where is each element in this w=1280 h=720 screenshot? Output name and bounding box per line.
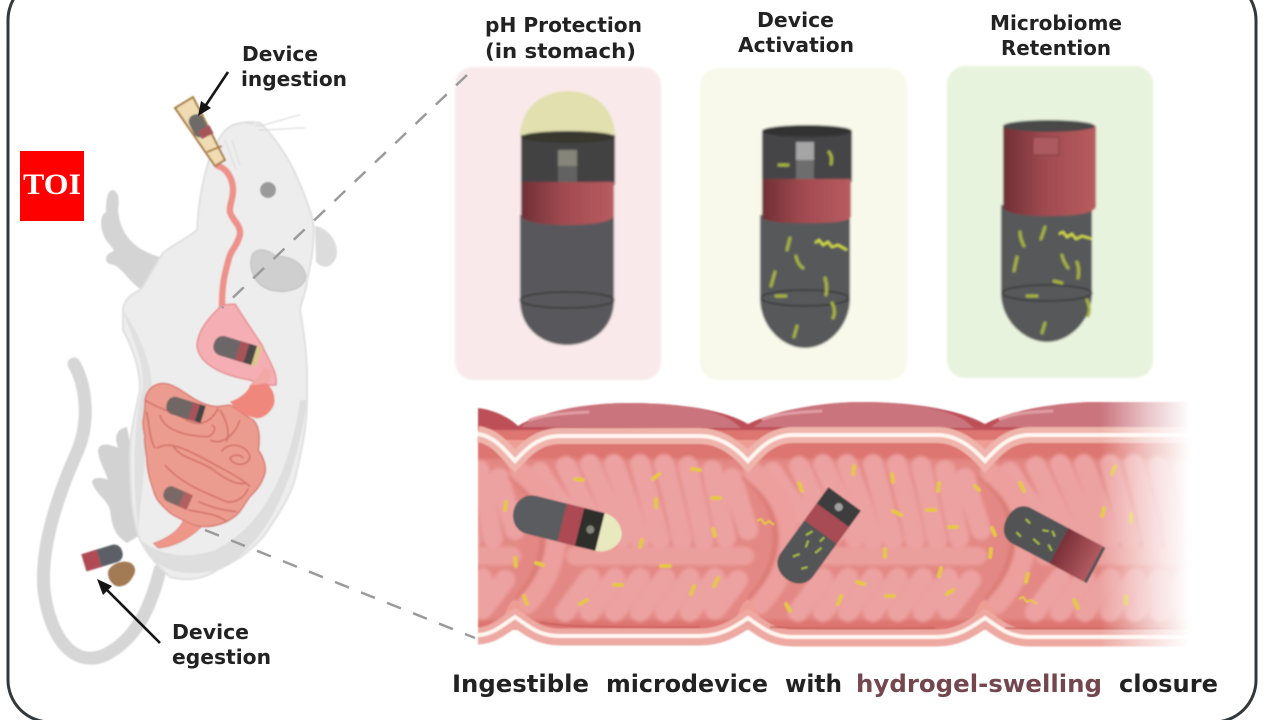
notch tips bottom	[492, 600, 1008, 630]
panel: device activation	[700, 68, 907, 380]
finger folds, lobe 0	[478, 459, 525, 621]
yellow bacteria specks	[505, 466, 1131, 611]
stomach outlet	[250, 367, 272, 385]
oral gavage device	[175, 97, 225, 166]
label: device ingestion	[241, 42, 347, 91]
egested capsule	[81, 543, 125, 571]
main caption	[452, 670, 1218, 698]
main caption: microdevice	[606, 670, 768, 698]
finger folds, lobe 2	[773, 464, 981, 612]
rat whiskers and nose	[225, 115, 305, 170]
heading: pH protection: pH Protection	[485, 13, 642, 37]
main caption: closure	[1119, 670, 1218, 698]
cap window	[796, 142, 814, 160]
cap window	[558, 150, 577, 166]
rat ear inner	[251, 250, 306, 291]
crescent shadow folds	[510, 475, 1014, 600]
bottom ring	[761, 290, 849, 306]
heading: device activation: Device	[757, 8, 834, 32]
TOI badge: TOI	[23, 168, 81, 201]
intestinal folds	[145, 400, 250, 522]
spiral bacterium	[1059, 232, 1092, 239]
bottom wall stripes	[478, 618, 1195, 638]
outer muscle bumps	[478, 402, 1195, 445]
arrow: device ingestion	[198, 72, 228, 116]
heading: microbiome retention	[990, 11, 1122, 60]
heading: pH protection	[485, 13, 642, 63]
panel: pH protection	[455, 67, 661, 380]
main caption: hydrogel-swelling	[856, 670, 1102, 698]
yellow spiral specks	[757, 519, 1037, 604]
crescent folds	[520, 472, 1026, 604]
muscle bump highlights	[521, 402, 1195, 428]
arrow: device egestion	[97, 579, 160, 643]
oesophagus	[218, 166, 240, 306]
capsule A: pH protected	[509, 492, 626, 556]
muscle bump gloss	[530, 411, 1052, 420]
notch tips top	[492, 440, 1008, 472]
dashed zoom line to intestine	[205, 530, 475, 638]
TOI badge	[20, 151, 84, 221]
bottom ring	[1002, 285, 1092, 301]
illustration: rat with digestive tract	[43, 97, 337, 658]
heading: pH protection: (in stomach)	[485, 39, 636, 63]
rectum	[153, 520, 202, 548]
finger folds, lobe 1	[540, 464, 748, 612]
mucosal folds	[478, 452, 1172, 624]
intestines	[143, 367, 275, 548]
capsule in upper intestine	[164, 395, 206, 423]
spiral bacterium	[815, 240, 847, 250]
bacteria	[771, 152, 834, 337]
rat belly shading	[140, 400, 307, 573]
bacteria	[1014, 227, 1089, 333]
heading: microbiome retention: Microbiome	[990, 11, 1122, 35]
duodenum	[230, 383, 275, 418]
central longitudinal folds	[478, 547, 1200, 565]
capsule B: activated	[770, 487, 861, 591]
label: device egestion: Device	[172, 620, 249, 644]
finger folds, lobe 3	[1010, 464, 1218, 612]
main caption: with	[785, 670, 842, 698]
pale enteric dome	[520, 91, 615, 137]
rat body	[123, 122, 314, 579]
rat flank shading	[123, 310, 152, 530]
capsule cap	[762, 131, 852, 182]
capsule body	[760, 215, 850, 348]
heading: device activation	[738, 8, 854, 57]
body of capsule	[520, 215, 614, 345]
capsule body	[1001, 205, 1092, 342]
capsule C: retention	[998, 500, 1106, 583]
label: device ingestion: ingestion	[241, 67, 347, 91]
panel: microbiome retention	[947, 66, 1153, 378]
top wall stripes	[478, 434, 1195, 461]
main caption: Ingestible	[452, 670, 589, 698]
sleeve window	[1033, 137, 1059, 155]
red hydrogel band	[521, 182, 614, 225]
rat lower hind foot	[92, 427, 140, 543]
capsule in stomach	[211, 334, 262, 367]
small intestine mass	[143, 383, 265, 527]
label: device ingestion: Device	[242, 42, 318, 66]
rat upper forelimb	[101, 190, 165, 290]
label: device egestion: egestion	[172, 645, 271, 669]
heading: microbiome retention: Retention	[1001, 36, 1111, 60]
lumen rim line	[540, 622, 1190, 629]
stool pellet	[108, 562, 135, 586]
label: device egestion	[172, 620, 271, 669]
fade to white at right end	[1100, 395, 1190, 660]
intestine cross-section	[476, 401, 1184, 648]
dark cap	[521, 135, 615, 185]
red band	[762, 179, 851, 223]
dashed zoom line to capsules	[222, 75, 467, 308]
rat ear outer	[315, 226, 337, 267]
heading: device activation: Activation	[738, 33, 854, 57]
capsule in lower intestine	[161, 484, 193, 510]
bottom ring	[520, 292, 614, 308]
lumen	[478, 430, 1195, 638]
red closed sleeve	[1003, 126, 1096, 216]
stomach	[197, 304, 276, 385]
rat eye	[260, 182, 276, 198]
rat tail	[43, 364, 160, 658]
